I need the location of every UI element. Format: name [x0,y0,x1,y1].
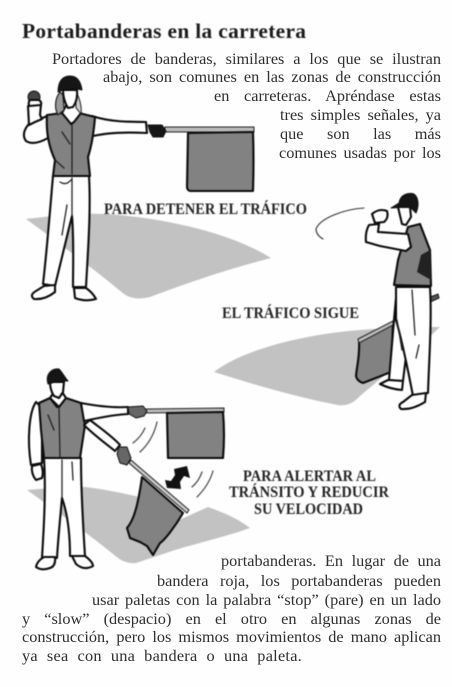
lower arm out [84,420,120,451]
front leg [396,287,431,396]
closing paragraph: y “slow” (despacio) en el otro en algunas zonas de [22,609,441,628]
cap [391,193,418,213]
flagger 1: stop traffic [24,76,254,300]
pole stub [425,294,439,304]
back leg [389,287,412,381]
ground shadow: figure 3 [27,487,250,563]
closing paragraph: ya sea con una bandera o una paleta. [22,646,302,665]
label: stop traffic: PARA DETENER EL TRÁFICO [104,199,307,218]
closing paragraph: construcción, pero los mismos movimientos de mano aplican [22,627,441,646]
face [50,382,64,398]
ground shadow: figure 2 [214,327,440,405]
face [398,207,411,225]
hard hat [58,76,82,92]
motion arc [316,208,364,239]
flagger 3: slow traffic [29,369,224,569]
flagger 2: traffic proceeds [316,193,439,409]
cap [47,369,68,384]
lower flag [127,460,189,555]
legs and pants [43,176,90,287]
face [63,90,77,108]
flag 1 [165,127,254,191]
intro paragraph: comunes usadas por los [279,143,441,162]
label: alert and slow traffic: PARA ALERTAR AL [243,468,376,485]
closing paragraph: portabanderas. En lugar de una [221,551,441,570]
label: alert and slow traffic: SU VELOCIDAD [254,501,363,518]
shoes [380,380,403,390]
motion arcs [133,422,213,497]
collar and neck [50,392,66,407]
shoes [32,285,55,299]
closing paragraph: usar paletas con la palabra “stop” (pare) en un lado [92,590,441,609]
extended arm [92,116,147,136]
hair [56,92,64,115]
ground shadow: figure 1 [26,214,271,298]
upper arm out [81,403,128,421]
vest [47,113,95,176]
arm and fist [366,224,411,251]
vest [394,224,431,286]
title: Portabanderas en la carretera [22,19,306,43]
intro paragraph: Portadores de banderas, similares a los que se ilustran [52,49,441,68]
closing paragraph: bandera roja, los portabanderas pueden [157,571,441,590]
hanging arm and fist [29,402,44,465]
shoes [36,557,55,569]
intro paragraph: tres simples señales, ya [280,105,441,124]
legs and pants [42,458,85,558]
double-headed arrow [165,466,190,489]
upper flag [146,408,224,458]
label: alert and slow traffic [229,468,389,518]
intro paragraph: abajo, son comunes en las zonas de construcción [103,67,441,86]
label: traffic proceeds: EL TRÁFICO SIGUE [222,303,359,322]
intro paragraph: en carreteras. Apréndase estas [214,86,441,105]
vest [39,398,85,458]
label: alert and slow traffic: TRÁNSITO Y REDUCIR [229,482,389,501]
collar and neck [62,104,81,124]
raised arm and hand [24,116,48,143]
flag held down [356,323,393,383]
intro paragraph: que son las más [280,124,441,143]
